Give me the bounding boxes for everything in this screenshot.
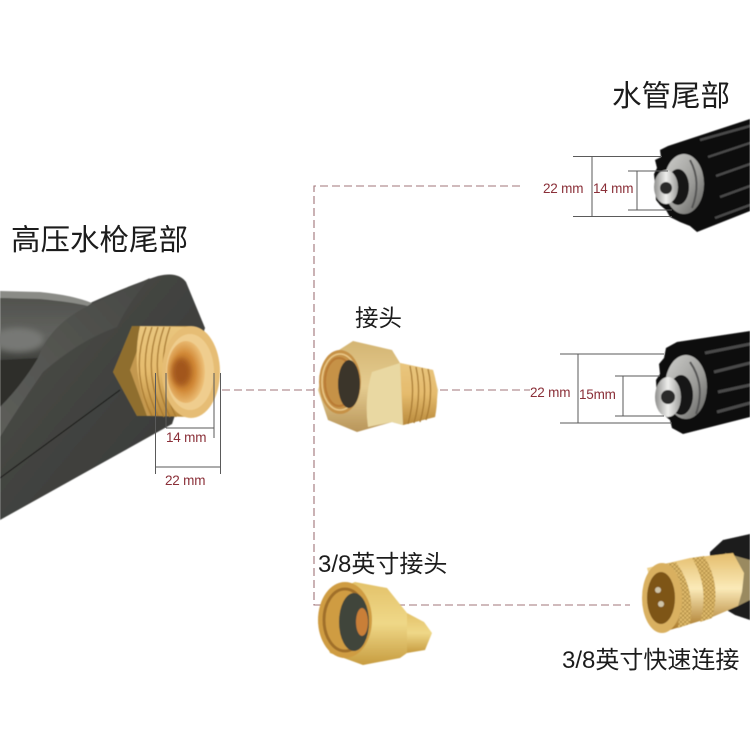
gun brass fitting with 14 mm and 22 mm dimensions: 22 mm xyxy=(165,473,205,488)
hose end two with 22 mm and 15 mm dimensions xyxy=(530,331,750,434)
label: 3/8 inch adapter: 3/8英寸接头 xyxy=(318,551,447,578)
gun brass fitting with 14 mm and 22 mm dimensions: 14 mm xyxy=(166,430,206,445)
hose end one with 22 mm and 14 mm dimensions: 14 mm xyxy=(593,181,633,196)
gun body xyxy=(0,274,205,520)
hose end one with 22 mm and 14 mm dimensions: 22 mm xyxy=(543,181,583,196)
label: adapter: 接头 xyxy=(355,305,402,331)
hose end two with 22 mm and 15 mm dimensions: 22 mm xyxy=(530,385,570,400)
dashed connector lines xyxy=(222,186,630,605)
gun brass fitting with 14 mm and 22 mm dimensions xyxy=(113,326,220,488)
hose end one with 22 mm and 14 mm dimensions xyxy=(543,119,750,232)
3/8 inch brass adapter xyxy=(318,582,432,665)
label: 3/8 inch quick connector: 3/8英寸快速连接 xyxy=(562,647,739,674)
heading: hose tail: 水管尾部 xyxy=(612,80,730,113)
brass adapter xyxy=(318,341,438,432)
heading: gun tail: 高压水枪尾部 xyxy=(11,224,188,257)
hose end two with 22 mm and 15 mm dimensions: 15mm xyxy=(579,387,616,402)
quick connector xyxy=(642,534,750,633)
